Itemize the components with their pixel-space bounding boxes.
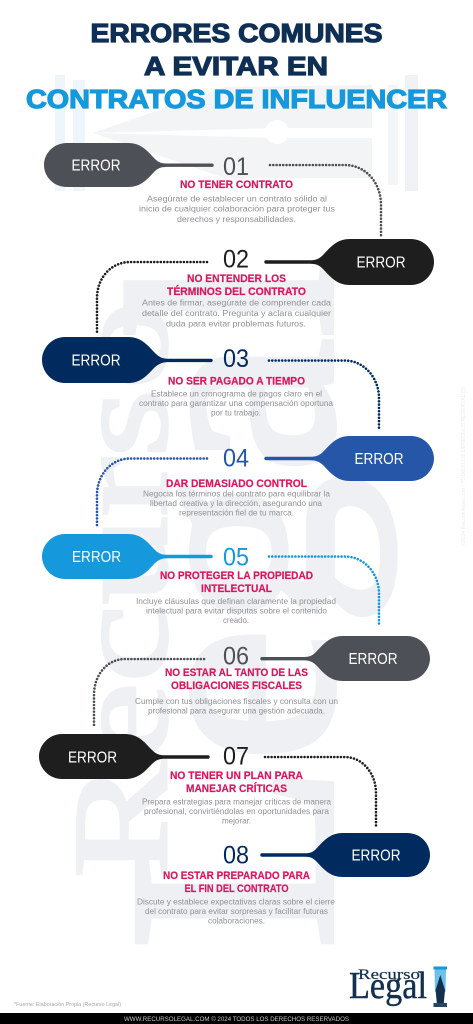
body 03: contrato para garantizar una compensación oportuna bbox=[139, 399, 334, 408]
heading 02: TÉRMINOS DEL CONTRATO bbox=[167, 285, 306, 298]
heading 06: OBLIGACIONES FISCALES bbox=[171, 680, 302, 692]
pill: error 06: ERROR bbox=[348, 651, 398, 668]
body 08: Discute y establece expectativas claras sobre el cierre bbox=[137, 898, 336, 906]
pill: error 04 bbox=[264, 436, 434, 481]
pill: error 01: ERROR bbox=[72, 158, 120, 174]
number 07: 07 bbox=[223, 742, 249, 770]
body 03: por tu trabajo. bbox=[211, 408, 261, 418]
connector 06 bbox=[94, 659, 204, 728]
body 01 bbox=[139, 194, 335, 224]
heading 06 bbox=[165, 667, 308, 692]
title: A EVITAR EN bbox=[144, 51, 328, 81]
number 02: 02 bbox=[223, 246, 249, 274]
pill: error 03 bbox=[42, 337, 213, 383]
body 01: derechos y responsabilidades. bbox=[177, 215, 296, 224]
number 04: 04 bbox=[223, 444, 249, 472]
number 06: 06 bbox=[223, 642, 249, 670]
footer bar: WWW.RECURSOLEGAL.COM © 2024 TODOS LOS DERECHOS RESERVADOS bbox=[124, 1016, 349, 1023]
heading 05: NO PROTEGER LA PROPIEDAD bbox=[160, 570, 313, 582]
watermark: pen and wordmark: Recurso bbox=[47, 301, 196, 878]
pill: error 05 bbox=[42, 534, 213, 579]
pill: error 07 bbox=[39, 734, 210, 779]
logo: Recurso Legal: Recurso bbox=[358, 967, 420, 983]
body 08 bbox=[137, 898, 336, 926]
title: CONTRATOS DE INFLUENCER bbox=[26, 84, 447, 114]
pill: error 08 bbox=[260, 833, 430, 877]
body 02: detalle del contrato. Pregunta y aclara cualquier bbox=[142, 309, 331, 318]
number 08: 08 bbox=[223, 842, 249, 870]
icon: pen nib column bbox=[434, 966, 447, 1007]
source note: *Fuente: Elaboración Propia (Recurso Legal) bbox=[14, 1002, 121, 1008]
pill: error 06 bbox=[260, 636, 430, 681]
heading 08 bbox=[163, 870, 310, 895]
number 05: 05 bbox=[223, 544, 249, 572]
heading 06: NO ESTAR AL TANTO DE LAS bbox=[165, 667, 308, 679]
body 07: profesional, convirtiéndolas en oportunidades para bbox=[144, 807, 330, 816]
step 02 bbox=[97, 239, 434, 332]
heading 08: NO ESTAR PREPARADO PARA bbox=[163, 870, 310, 882]
vertical copyright note: ©2024 Recursolegal.com · TODOS LOS DERECHOS RESERVADOS bbox=[460, 386, 467, 546]
body 04 bbox=[143, 490, 331, 518]
pill: error 04: ERROR bbox=[354, 451, 404, 468]
pill: error 03: ERROR bbox=[72, 352, 120, 370]
body 05: creado. bbox=[223, 616, 249, 625]
heading 05 bbox=[160, 570, 313, 595]
title: ERRORES COMUNES bbox=[90, 18, 382, 48]
heading 01: NO TENER CONTRATO bbox=[180, 179, 293, 191]
body 06: Cumple con tus obligaciones fiscales y consulta con un bbox=[135, 697, 338, 706]
heading 05: INTELECTUAL bbox=[201, 583, 272, 595]
pill: error 02: ERROR bbox=[356, 254, 406, 272]
body 05: intelectual para evitar disputas sobre el contenido bbox=[146, 606, 328, 616]
step 05 bbox=[42, 534, 379, 626]
body 08: colaboraciones. bbox=[208, 916, 265, 926]
title bbox=[26, 18, 447, 114]
heading 07: MANEJAR CRÍTICAS bbox=[186, 782, 287, 795]
heading 07 bbox=[170, 770, 303, 795]
body 01: inicio de cualquier colaboración para proteger tus bbox=[139, 204, 335, 214]
body 06: profesional para asegurar una gestión adecuada. bbox=[148, 706, 325, 716]
heading 08: EL FIN DEL CONTRATO bbox=[184, 883, 289, 895]
body 02 bbox=[142, 298, 332, 328]
pill: error 08: ERROR bbox=[352, 848, 400, 864]
pill: error 05: ERROR bbox=[72, 549, 121, 566]
watermark: pen and wordmark bbox=[47, 75, 418, 950]
body 04: Negocia los términos del contrato para equilibrar la bbox=[143, 490, 331, 498]
step 08 bbox=[137, 833, 430, 926]
heading 04: DAR DEMASIADO CONTROL bbox=[166, 478, 307, 490]
body 03: Establece un cronograma de pagos claro en el bbox=[151, 390, 322, 398]
step 07 bbox=[39, 734, 376, 827]
connector 04 bbox=[97, 458, 207, 528]
body 02: Antes de firmar, asegúrate de comprender cada bbox=[142, 298, 332, 308]
body 02: duda para evitar problemas futuros. bbox=[166, 320, 306, 328]
body 07: mejorar. bbox=[222, 816, 251, 826]
step 01 bbox=[44, 143, 381, 236]
connector 01 bbox=[270, 165, 381, 236]
body 05: Incluye cláusulas que definan claramente la propiedad bbox=[136, 597, 336, 606]
body 08: del contrato para evitar sorpresas y facilitar futuras bbox=[145, 907, 328, 916]
step 03 bbox=[42, 337, 379, 430]
pill: error 07: ERROR bbox=[68, 750, 117, 766]
connector 05 bbox=[269, 556, 379, 626]
connector 02 bbox=[97, 262, 207, 332]
body 04: libertad creativa y la dirección, asegurando una bbox=[150, 499, 323, 508]
pill: error 01 bbox=[44, 143, 214, 187]
watermark: pen and wordmark: Legal bbox=[68, 253, 396, 950]
connector 03 bbox=[269, 360, 379, 430]
body 05 bbox=[136, 597, 336, 625]
number 03: 03 bbox=[223, 345, 249, 373]
heading 03: NO SER PAGADO A TIEMPO bbox=[168, 376, 305, 388]
step 06 bbox=[94, 636, 430, 728]
logo: Recurso Legal: Legal bbox=[349, 965, 427, 1007]
heading 07: NO TENER UN PLAN PARA bbox=[170, 770, 303, 782]
body 07: Prepara estrategias para manejar críticas de manera bbox=[142, 798, 332, 806]
body 03 bbox=[139, 390, 334, 418]
heading 02: NO ENTENDER LOS bbox=[187, 273, 286, 285]
body 04: representación fiel de tu marca. bbox=[179, 508, 294, 518]
step 04 bbox=[97, 436, 434, 528]
body 07 bbox=[142, 798, 332, 826]
connector 07 bbox=[265, 757, 376, 827]
pill: error 02 bbox=[264, 239, 434, 285]
heading 02 bbox=[167, 273, 306, 298]
body 01: Asegúrate de establecer un contrato sólido al bbox=[147, 194, 327, 204]
footer bar bbox=[0, 1013, 473, 1024]
body 06 bbox=[135, 697, 338, 716]
number 01: 01 bbox=[223, 153, 249, 181]
